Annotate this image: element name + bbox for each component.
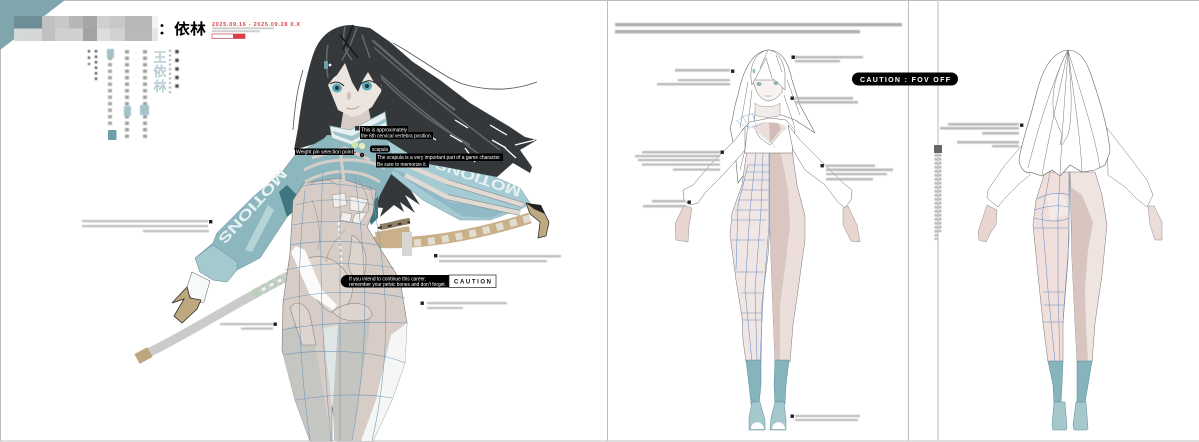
blurred notes: back figure — [940, 123, 1023, 147]
callout: scapula note — [376, 154, 503, 168]
back left leg — [1033, 172, 1070, 362]
character name vertical — [153, 50, 167, 94]
callout: pelvic bones caution: CAUTION — [454, 280, 491, 286]
neck — [340, 106, 372, 132]
hair strands — [314, 28, 500, 155]
back right hand — [1148, 206, 1162, 240]
right glove — [526, 203, 549, 238]
chest jacket — [300, 135, 396, 215]
back left hand — [978, 205, 997, 242]
title — [14, 16, 206, 41]
front eyes and mouth — [756, 81, 778, 96]
title name: ：依林 — [158, 20, 206, 38]
left shoulder mesh — [736, 113, 775, 148]
front hair back — [730, 50, 815, 183]
column 3 head glyph — [107, 49, 114, 58]
figure: back view — [978, 50, 1162, 430]
left glove — [172, 287, 201, 323]
column 4 — [95, 50, 97, 80]
note: head left — [657, 69, 734, 85]
front bangs — [751, 50, 785, 90]
inner thigh pale — [323, 325, 340, 408]
callout: scapula note: The scapula is a very important part of a game character. — [377, 155, 501, 161]
note: hip — [420, 302, 507, 309]
sleeve fold highlight — [245, 205, 274, 252]
column 1 accent — [140, 105, 149, 115]
callout: weight pin: Weight pin selection point — [296, 150, 354, 156]
front leg shadow — [770, 153, 790, 362]
face — [328, 58, 382, 117]
left arm — [683, 127, 745, 205]
right half skin — [770, 150, 805, 362]
collar — [330, 112, 387, 145]
date and tag — [212, 22, 300, 38]
back hair strands — [1028, 50, 1100, 175]
bangs dark x — [340, 25, 358, 58]
column: small text — [169, 50, 171, 93]
rib bones — [332, 193, 368, 224]
left side hair over face — [310, 60, 335, 135]
note: shoes — [790, 414, 860, 421]
body mesh lines — [282, 170, 407, 441]
chest bones — [304, 148, 385, 190]
callout: scapula note: Be sure to memorize it. — [377, 162, 427, 168]
character name vertical: 王 — [153, 50, 167, 65]
side hair thin line — [293, 70, 303, 130]
back right leg — [1070, 172, 1107, 362]
left femur grey — [283, 318, 331, 441]
blurred subtitle — [212, 28, 274, 32]
note: katana — [434, 254, 561, 262]
callout: cervical vertebra — [360, 126, 433, 140]
date: 2025.09.16 - 2025.09.28 0.X — [212, 22, 300, 28]
bangs highlight — [326, 27, 370, 78]
right arm bones fill — [395, 160, 523, 213]
blurred intro paragraph — [615, 23, 902, 33]
collar teal stripe — [332, 118, 386, 141]
back right arm — [1107, 128, 1153, 207]
front shoe toes — [751, 422, 785, 429]
note: head right — [792, 56, 863, 62]
right thigh white — [361, 323, 407, 441]
right chest shadow — [366, 196, 378, 225]
bangs — [322, 25, 382, 92]
hair main mass — [294, 25, 537, 177]
right arm — [788, 125, 852, 208]
torso and legs base — [282, 178, 407, 441]
front legs and torso skin — [730, 150, 805, 362]
vertical text columns — [89, 49, 177, 141]
front hair clip — [752, 68, 756, 74]
left cuff — [186, 272, 210, 303]
hair clip — [324, 61, 331, 69]
figure: front view — [675, 50, 860, 430]
back glute pale — [1046, 192, 1068, 220]
chest shadow — [769, 123, 781, 143]
left sleeve — [195, 135, 340, 282]
corner triangle — [0, 0, 65, 50]
column 5 — [88, 50, 90, 65]
front left hand — [675, 205, 692, 242]
figure: main character x-ray pose — [137, 25, 549, 441]
note: right arm — [820, 164, 893, 180]
callout: cervical vertebra: the 6th cervical vertebra position. — [361, 134, 432, 140]
front hair strands — [740, 50, 800, 170]
nose — [347, 92, 351, 100]
caution pill: CAUTION : FOV OFF — [860, 77, 951, 84]
left half skin — [730, 150, 770, 362]
back mesh — [1033, 172, 1069, 362]
caution pill — [852, 72, 958, 86]
column 3 — [108, 50, 112, 128]
right thigh beige — [352, 298, 397, 441]
blurred notes: front figure — [635, 56, 893, 421]
teal tag — [108, 130, 116, 140]
blurred notes: left page — [82, 220, 561, 330]
callout: pelvic bones caution: remember your pelvic bones and don't forget. — [349, 282, 446, 288]
pixelated title mosaic — [14, 16, 158, 41]
front socks — [746, 360, 789, 404]
left katana blade — [137, 274, 292, 359]
column 2 — [125, 50, 129, 141]
callout: scapula label: scapula — [372, 147, 388, 153]
right femur grey — [333, 313, 372, 441]
back left arm — [987, 142, 1030, 207]
character name vertical: 林 — [153, 79, 167, 94]
pelvis bones — [290, 235, 372, 345]
sleeve lettering: MOTIONS — [215, 166, 291, 247]
column 2 accent — [124, 106, 131, 116]
front shoes — [749, 402, 786, 430]
back shoes — [1052, 402, 1088, 430]
column: character label — [175, 50, 179, 92]
front head — [753, 80, 783, 101]
vertical sidebar tag — [934, 145, 942, 240]
back leg shadow — [1071, 187, 1093, 362]
note: neck — [790, 96, 858, 104]
column 1 — [143, 50, 147, 141]
character name vertical: 依 — [153, 64, 167, 79]
note: thigh — [220, 322, 277, 330]
right sleeve — [387, 138, 530, 220]
sleeve inner shadow — [279, 185, 300, 217]
callout: pelvic bones caution — [341, 275, 496, 288]
red tag — [212, 34, 245, 38]
front right hand — [843, 206, 860, 242]
spine — [339, 222, 341, 265]
callout: cervical vertebra: This is approximately — [361, 128, 407, 134]
note: arm — [82, 220, 212, 232]
front mesh — [731, 153, 770, 362]
hair tip highlights — [425, 120, 535, 162]
note: wrist — [643, 200, 691, 207]
back hair — [1019, 50, 1110, 176]
right sleeve lettering: MOTIONS — [433, 156, 523, 200]
iliac white highlight — [291, 246, 337, 310]
hair under arm — [373, 160, 420, 217]
right sleeve arm bones — [447, 182, 523, 213]
mouth — [347, 106, 359, 109]
front neck turtleneck — [755, 103, 780, 117]
marker dots — [352, 126, 365, 157]
flying hair thin line — [393, 43, 537, 89]
body outline details — [310, 180, 368, 262]
back socks — [1048, 361, 1092, 403]
right sleeve shade — [390, 168, 510, 218]
right katana — [372, 218, 530, 256]
sleeve cuff fold — [195, 245, 237, 282]
eyes — [330, 81, 375, 92]
callout: pelvic bones caution: If you intend to continue this career, — [349, 276, 426, 282]
note: left arm — [635, 150, 724, 171]
chest skin — [751, 122, 787, 143]
front jacket torso — [742, 118, 795, 153]
